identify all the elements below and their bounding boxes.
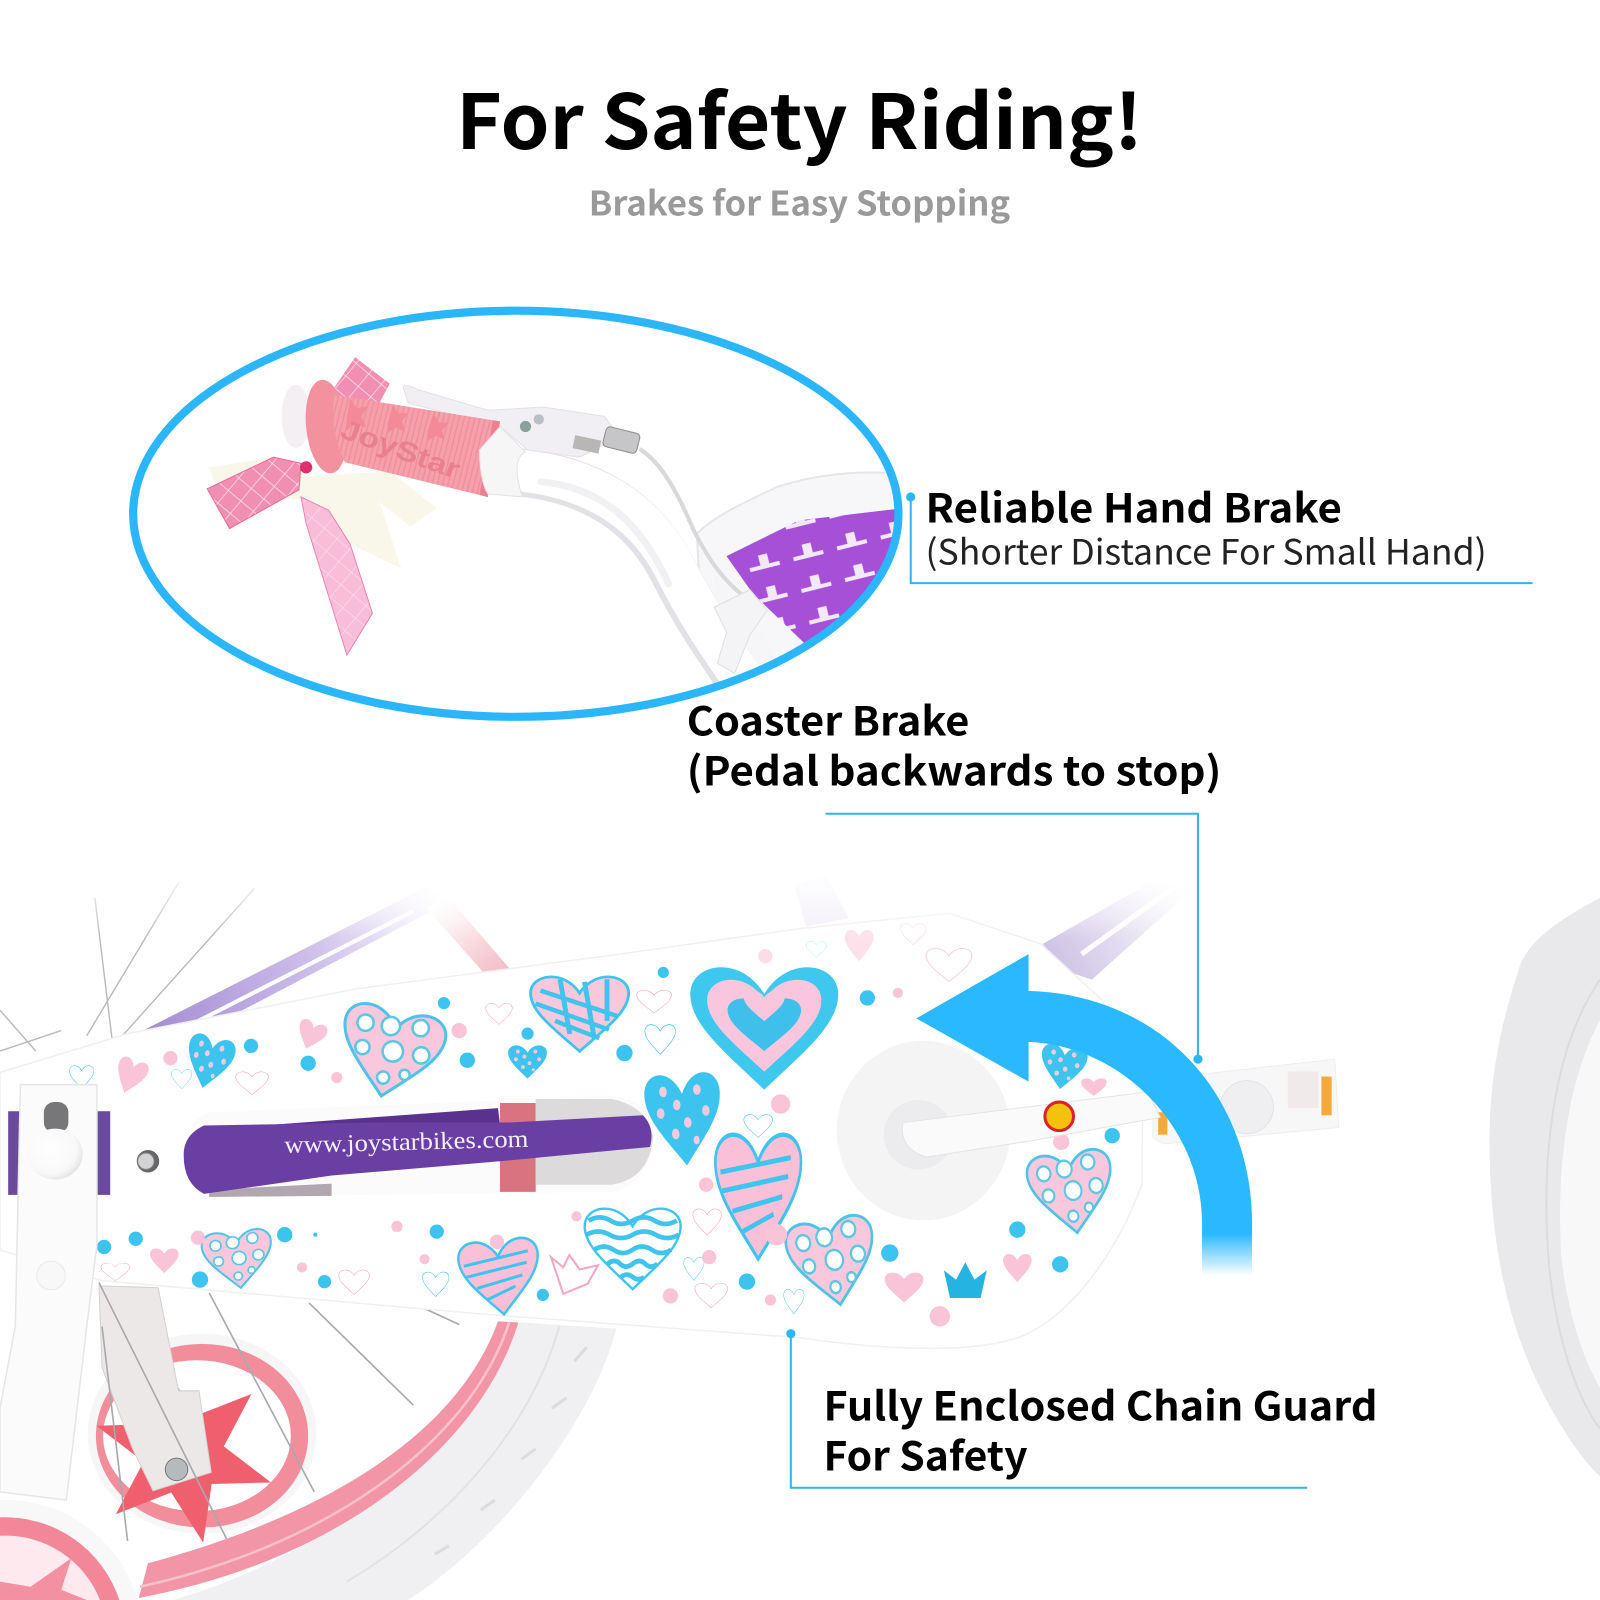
callout line: chain guard: [786, 1329, 1307, 1488]
heart decorations: [69, 924, 1120, 1327]
title: For Safety Riding!: [456, 61, 1143, 171]
handlebar tube: [505, 469, 752, 694]
heading: chain guard: For Safety: [823, 1425, 1028, 1482]
upper spokes: [0, 883, 255, 1429]
pink grip: JoyStar: [337, 413, 465, 485]
lower spokes: [99, 1283, 459, 1541]
top ribbon: [329, 357, 390, 410]
heading: coaster brake: (Pedal backwards to stop): [687, 741, 1221, 798]
crank logo: [1045, 1102, 1073, 1131]
guard bolt: [137, 1150, 159, 1172]
heading: coaster brake: [687, 691, 1221, 798]
frame tubes: [133, 876, 1199, 1036]
cable adjuster: [520, 414, 641, 454]
crank arm: [884, 1092, 1160, 1169]
crank disc: [837, 1041, 1010, 1220]
brake lever: [403, 386, 620, 457]
pink bow loop: [207, 457, 301, 529]
purple frame tube: [184, 1115, 652, 1194]
training wheel: [72, 1334, 316, 1557]
long pink ribbon tail: [301, 497, 372, 655]
circle outline: [133, 311, 898, 717]
pink grip: [333, 395, 500, 497]
callout line: hand brake: [906, 492, 1533, 583]
heading: coaster brake: Coaster Brake: [687, 691, 969, 748]
front tyre: [1490, 898, 1600, 1477]
note: shorter distance: (Shorter Distance For Small Hand): [926, 524, 1487, 574]
lower training wheel: [0, 1500, 138, 1600]
illustration: bike rear section: [0, 867, 1600, 1600]
grip flange: [301, 378, 352, 475]
heading: chain guard: [823, 1375, 1378, 1482]
purple bracket: [8, 1111, 110, 1195]
arrow: coaster brake direction: [916, 954, 1252, 1276]
bow knot: [300, 461, 312, 473]
grip collar: [480, 427, 526, 497]
white bar end disc: [282, 385, 310, 448]
basket: [696, 472, 894, 684]
silver bracket: [99, 1286, 211, 1491]
pink wheel rim: [139, 1321, 518, 1598]
cable clamp: [714, 590, 767, 673]
chain guard body: [0, 913, 1143, 1348]
heading: reliable hand brake: Reliable Hand Brake: [926, 477, 1342, 534]
pedal: [1153, 1059, 1339, 1144]
guard slot: [184, 1096, 653, 1197]
heading: chain guard: Fully Enclosed Chain Guard: [823, 1375, 1378, 1432]
website text: www.joystarbikes.com: [284, 1126, 529, 1159]
top fade over bike: [0, 867, 1224, 939]
axle knob: [28, 1129, 83, 1180]
panel: hand brake close-up circle: [133, 311, 908, 717]
brake cable: [640, 449, 745, 597]
subtitle: Brakes for Easy Stopping: [589, 176, 1010, 225]
cream ribbon tails: [209, 457, 437, 568]
white fork: [0, 1085, 97, 1500]
callout line: coaster brake: [826, 814, 1203, 1064]
rear tyre: [173, 1321, 616, 1600]
